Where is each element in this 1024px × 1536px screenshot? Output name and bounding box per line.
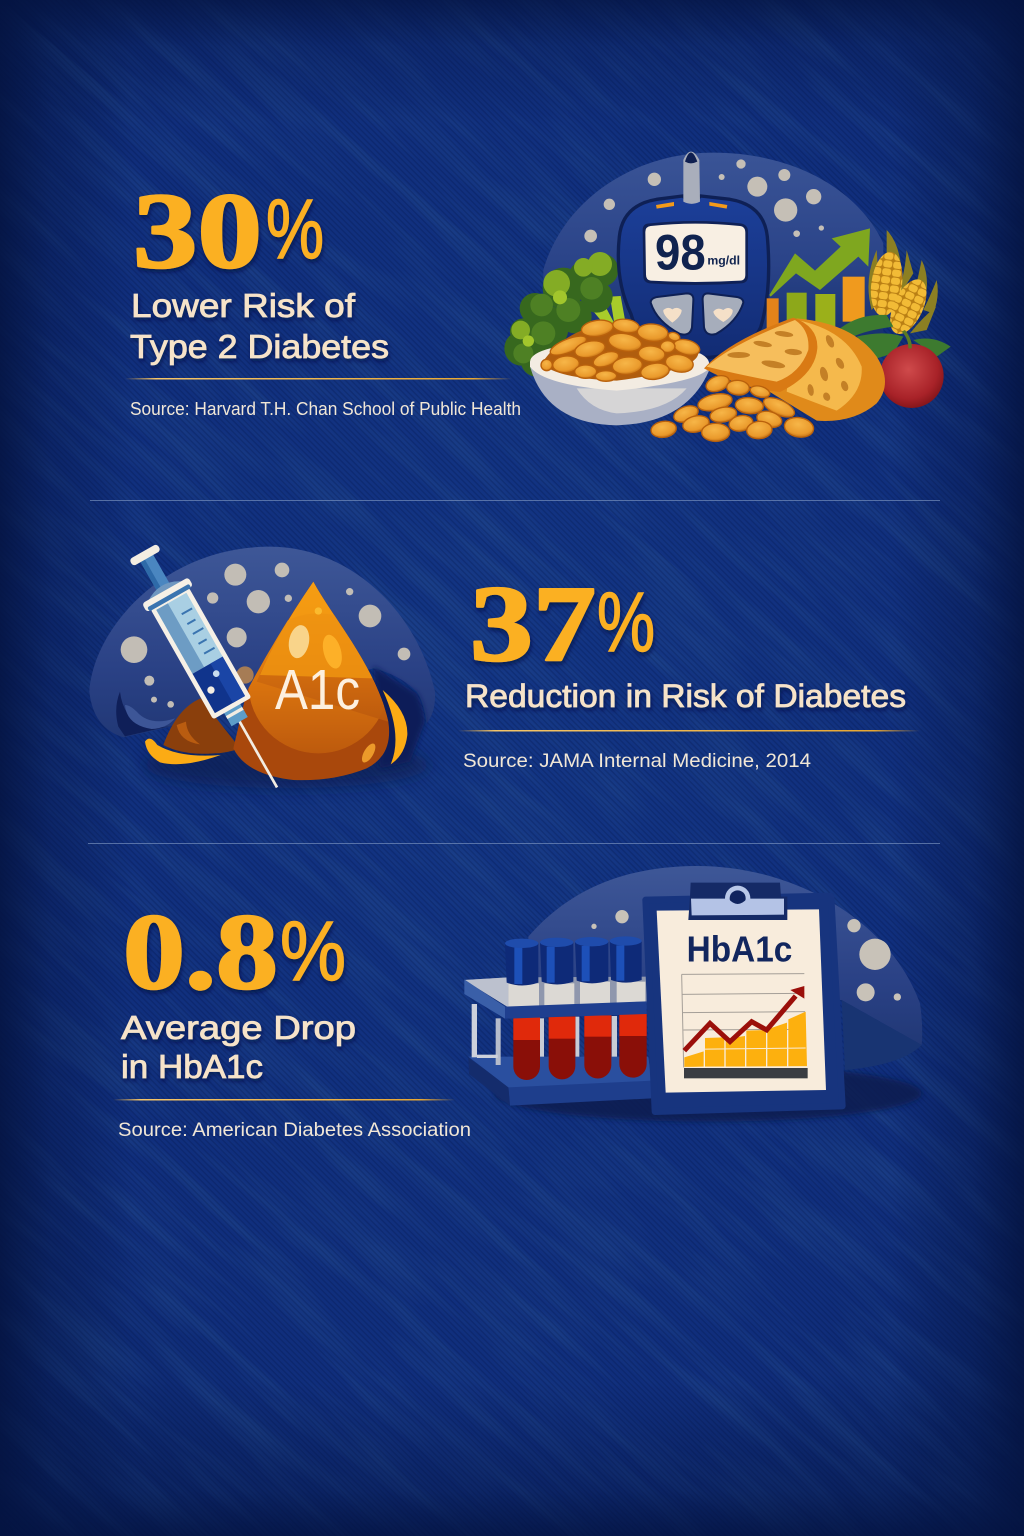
heading: lower risk of type 2 diabetes xyxy=(130,287,389,365)
heading: average drop in HbA1c xyxy=(121,1009,356,1085)
stat: 37%: 37 xyxy=(470,565,596,684)
clipboard xyxy=(646,883,842,1112)
meter screen: 98 xyxy=(655,224,706,280)
dome backdrop xyxy=(543,153,883,340)
heading: average drop in HbA1c: Average Drop xyxy=(121,1009,356,1046)
blood xyxy=(513,1014,647,1080)
broccoli xyxy=(504,252,625,377)
bread xyxy=(704,318,885,421)
stat: 0.8%: % xyxy=(280,904,346,998)
bowl of beans xyxy=(530,318,709,425)
source text: Source: American Diabetes Association xyxy=(118,1120,471,1141)
clipboard title: HbA1c xyxy=(687,929,792,970)
blood drop with A1c: A1c xyxy=(275,659,360,722)
tube caps xyxy=(505,936,642,985)
slab and glass tubes xyxy=(464,977,647,1007)
glucose meter xyxy=(618,152,769,357)
panel: 0.8% average drop xyxy=(113,893,471,1141)
stat: 30%: 30 xyxy=(133,172,262,291)
pile of beans xyxy=(650,373,815,441)
corn xyxy=(867,230,938,339)
heading: lower risk of type 2 diabetes: Lower Risk of xyxy=(131,287,356,324)
stat: 30%: % xyxy=(266,182,324,276)
meter screen: mg/dl xyxy=(707,254,740,268)
stat: 0.8% xyxy=(123,893,346,1012)
clip xyxy=(688,883,787,920)
stat: 37% xyxy=(470,565,655,684)
floating dots xyxy=(591,910,901,1001)
heading: lower risk of type 2 diabetes: Type 2 Diabetes xyxy=(130,328,389,365)
panel: 37% reduction xyxy=(458,565,920,772)
rising chart and arrow xyxy=(767,228,870,328)
leaves xyxy=(840,315,951,358)
small drop xyxy=(163,698,240,754)
meter screen xyxy=(643,221,748,285)
illustration: blood tubes and HbA1c clipboard xyxy=(464,866,922,1122)
panel: 30% lower risk xyxy=(125,172,521,419)
blood drop with A1c xyxy=(233,582,389,780)
stat: 30% xyxy=(133,172,324,291)
source text: Source: Harvard T.H. Chan School of Public Health xyxy=(130,399,521,419)
apple xyxy=(880,330,944,408)
heading: reduction in risk of diabetes: Reduction in Risk of Diabetes xyxy=(465,678,906,714)
meter buttons xyxy=(651,293,743,335)
dark crescents xyxy=(116,692,175,736)
paper xyxy=(657,909,826,1093)
area and line chart xyxy=(682,974,808,1078)
dome backdrop xyxy=(89,547,435,737)
illustration: glucose meter and foods xyxy=(504,152,951,441)
source text: Source: JAMA Internal Medicine, 2014 xyxy=(463,751,811,772)
floating dots xyxy=(121,563,410,708)
heading: average drop in HbA1c: in HbA1c xyxy=(121,1048,263,1085)
test tube rack xyxy=(464,936,652,1106)
floating dots xyxy=(584,159,824,242)
orange swooshes xyxy=(145,690,407,764)
illustration: syringe and A1c drop xyxy=(89,538,435,801)
ground shadow xyxy=(495,1065,922,1122)
syringe xyxy=(120,538,300,801)
stat: 37%: % xyxy=(597,575,655,669)
dome backdrop xyxy=(528,866,922,1045)
stat: 0.8%: 0.8 xyxy=(123,893,278,1012)
ground shadow xyxy=(143,742,430,788)
